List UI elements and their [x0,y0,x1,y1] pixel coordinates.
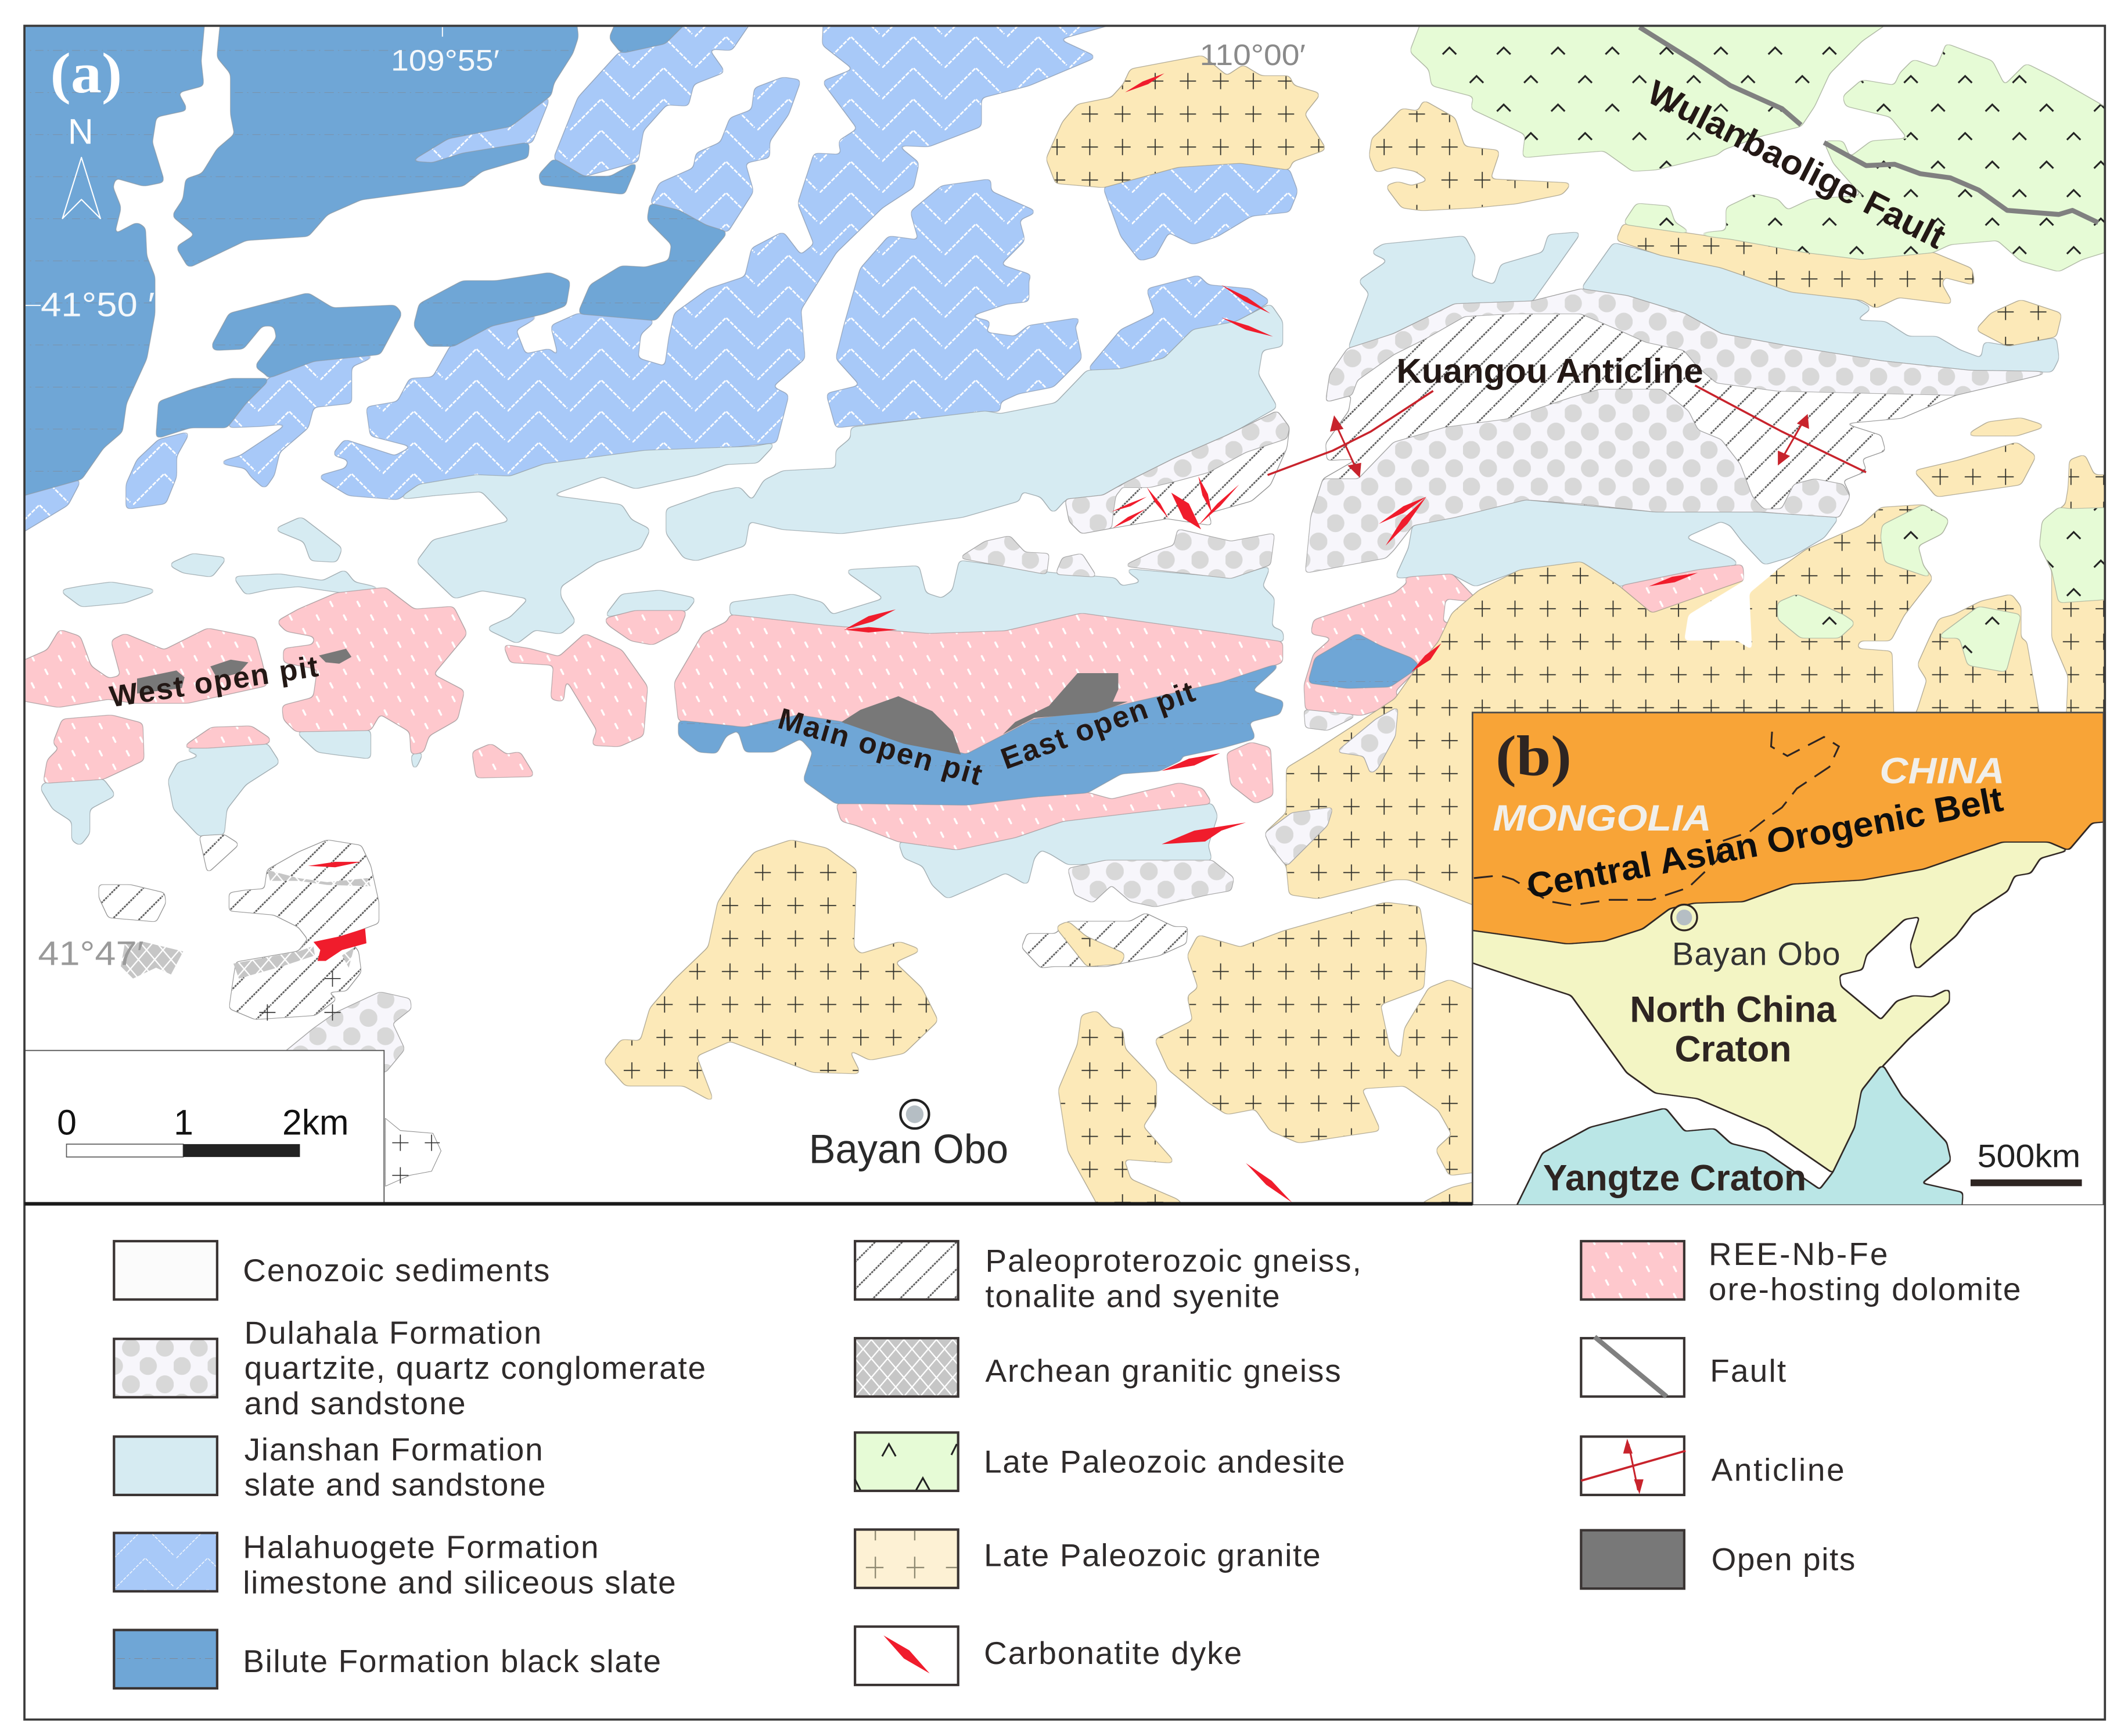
unit: Dulahala Formation quartzite [277,289,2052,1072]
unit: open pits [137,649,1128,754]
unit: Bilute Formation central belt [678,634,1419,805]
legend: Late Paleozoic andesite [855,1432,1345,1491]
legend: Carbonatite dyke [855,1627,1242,1685]
map labels: structures and pits: Main open pit [775,701,986,792]
unit: Late Paleozoic granite [604,56,2117,1221]
scale bar box: 1 [174,1103,193,1142]
legend: Paleoproterozoic gneiss [855,1241,1361,1314]
unit: Jianshan Formation slate and sandstone [41,232,2059,898]
coordinates labels: 109°55′ [391,44,499,77]
legend: Cenozoic sediments [114,1241,549,1299]
legend: Late Paleozoic andesite: Late Paleozoic andesite [984,1443,1345,1479]
legend: Cenozoic sediments: Cenozoic sediments [243,1252,549,1288]
Bayan Obo marker [809,1100,1008,1172]
inset frame [1472,713,2104,1205]
inset Bayan Obo marker [1672,904,1697,930]
Bayan Obo marker: Bayan Obo [809,1127,1008,1172]
unit: REE-Nb-Fe ore-hosting dolomite [13,565,1744,850]
legend: REE-Nb-Fe ore-hosting dolomite: ore-hosting dolomite [1709,1271,2021,1307]
scale bar box: 2km [282,1103,349,1142]
map labels: structures and pits: East open pit [996,674,1199,775]
inset labels: CHINA [1879,750,2004,791]
unit: Halahuogete Formation limestone and siliceous slate [13,16,1297,537]
scale bar box [24,1051,384,1204]
map labels: structures and pits [107,73,1952,792]
region: Central Asian Orogenic Belt [1452,692,2124,943]
legend: Anticline: Anticline [1712,1451,1845,1487]
legend: Bilute Formation: Bilute Formation black slate [243,1643,661,1679]
legend: Open pits [1581,1530,1855,1588]
coordinates labels [24,27,1306,972]
legend: Jianshan Formation: Jianshan Formation [245,1431,543,1467]
inset labels: 500km [1978,1138,2080,1174]
carbonatite dykes [308,73,1698,1202]
legend: Dulahala Formation [114,1314,706,1421]
river gaps across granite [1684,562,1781,650]
coordinates labels: 41°47′ [38,935,144,972]
small outcrop beside scale box [259,971,441,1186]
panel: inset tectonic map (b) [1452,692,2124,1228]
legend: Anticline [1581,1436,1845,1495]
legend: Bilute Formation [114,1630,661,1688]
legend: Late Paleozoic granite [855,1530,1321,1588]
region: North China Craton [1452,842,2068,1173]
anticline axes and arrows [1268,386,1866,478]
legend: Dulahala Formation: quartzite, quartz conglomerate [245,1350,706,1386]
inset labels: North China [1630,990,1836,1030]
coordinates labels: 41°50 ′ [41,286,154,324]
panel: legend [24,1205,2105,1720]
legend: Fault: Fault [1710,1353,1786,1389]
Wulanbaolige Fault line [1640,27,2098,222]
legend: Dulahala Formation: and sandstone [245,1385,465,1421]
legend: Carbonatite dyke: Carbonatite dyke [984,1635,1242,1671]
legend: Dulahala Formation: Dulahala Formation [245,1314,541,1350]
unit: Archean granitic gneiss [121,870,371,979]
north arrow: N [68,112,94,152]
region: Yangtze Craton [1507,1065,1962,1228]
inset labels: Bayan Obo [1672,935,1841,972]
legend: Fault [1581,1337,1786,1397]
legend: Halahuogete Formation: Halahuogete Formation [243,1529,598,1565]
map labels: structures and pits: West open pit [107,649,320,713]
legend: Jianshan Formation: slate and sandstone [245,1467,545,1503]
legend: Open pits: Open pits [1712,1541,1855,1577]
national border dashed line [1474,726,1839,905]
legend: Paleoproterozoic gneiss: Paleoproterozoic gneiss, [985,1243,1361,1279]
legend: REE-Nb-Fe ore-hosting dolomite: REE-Nb-Fe [1709,1236,1888,1272]
unit: Late Paleozoic andesite [1410,16,2117,672]
north arrow [62,112,100,218]
inset labels: Craton [1675,1029,1791,1069]
unit: Bilute Formation black slate [13,16,727,498]
inset labels [1493,725,2080,1198]
scale bar box: 0 [57,1103,77,1142]
legend: Halahuogete Formation: limestone and siliceous slate [243,1564,676,1600]
panel label (a): (a) [50,42,122,105]
legend: Jianshan Formation [114,1431,545,1503]
legend: Archean granitic gneiss [855,1338,1341,1397]
map labels: structures and pits: Kuangou Anticline [1396,351,1703,390]
unit: Dulahala Formation over granite [1265,707,1398,866]
legend: Paleoproterozoic gneiss: tonalite and syenite [985,1278,1280,1314]
panel: geological map (a) [13,16,2117,1221]
inset labels: Central Asian Orogenic Belt [1523,779,2006,906]
legend: Archean granitic gneiss: Archean granitic gneiss [985,1353,1341,1389]
map labels: structures and pits: Wulanbaolige Fault [1641,73,1952,256]
coordinates labels: 110°00′ [1200,38,1306,71]
legend: Halahuogete Formation [114,1529,676,1600]
inset labels: (b) [1496,725,1572,788]
legend: REE-Nb-Fe ore-hosting dolomite [1581,1236,2021,1307]
inset labels: Yangtze Craton [1543,1158,1806,1198]
unit: Paleoproterozoic gneiss, tonalite and syenite [99,289,2052,1019]
inset labels: MONGOLIA [1493,798,1712,839]
inset scale bar [1971,1180,2082,1186]
legend: Late Paleozoic granite: Late Paleozoic granite [984,1537,1321,1573]
